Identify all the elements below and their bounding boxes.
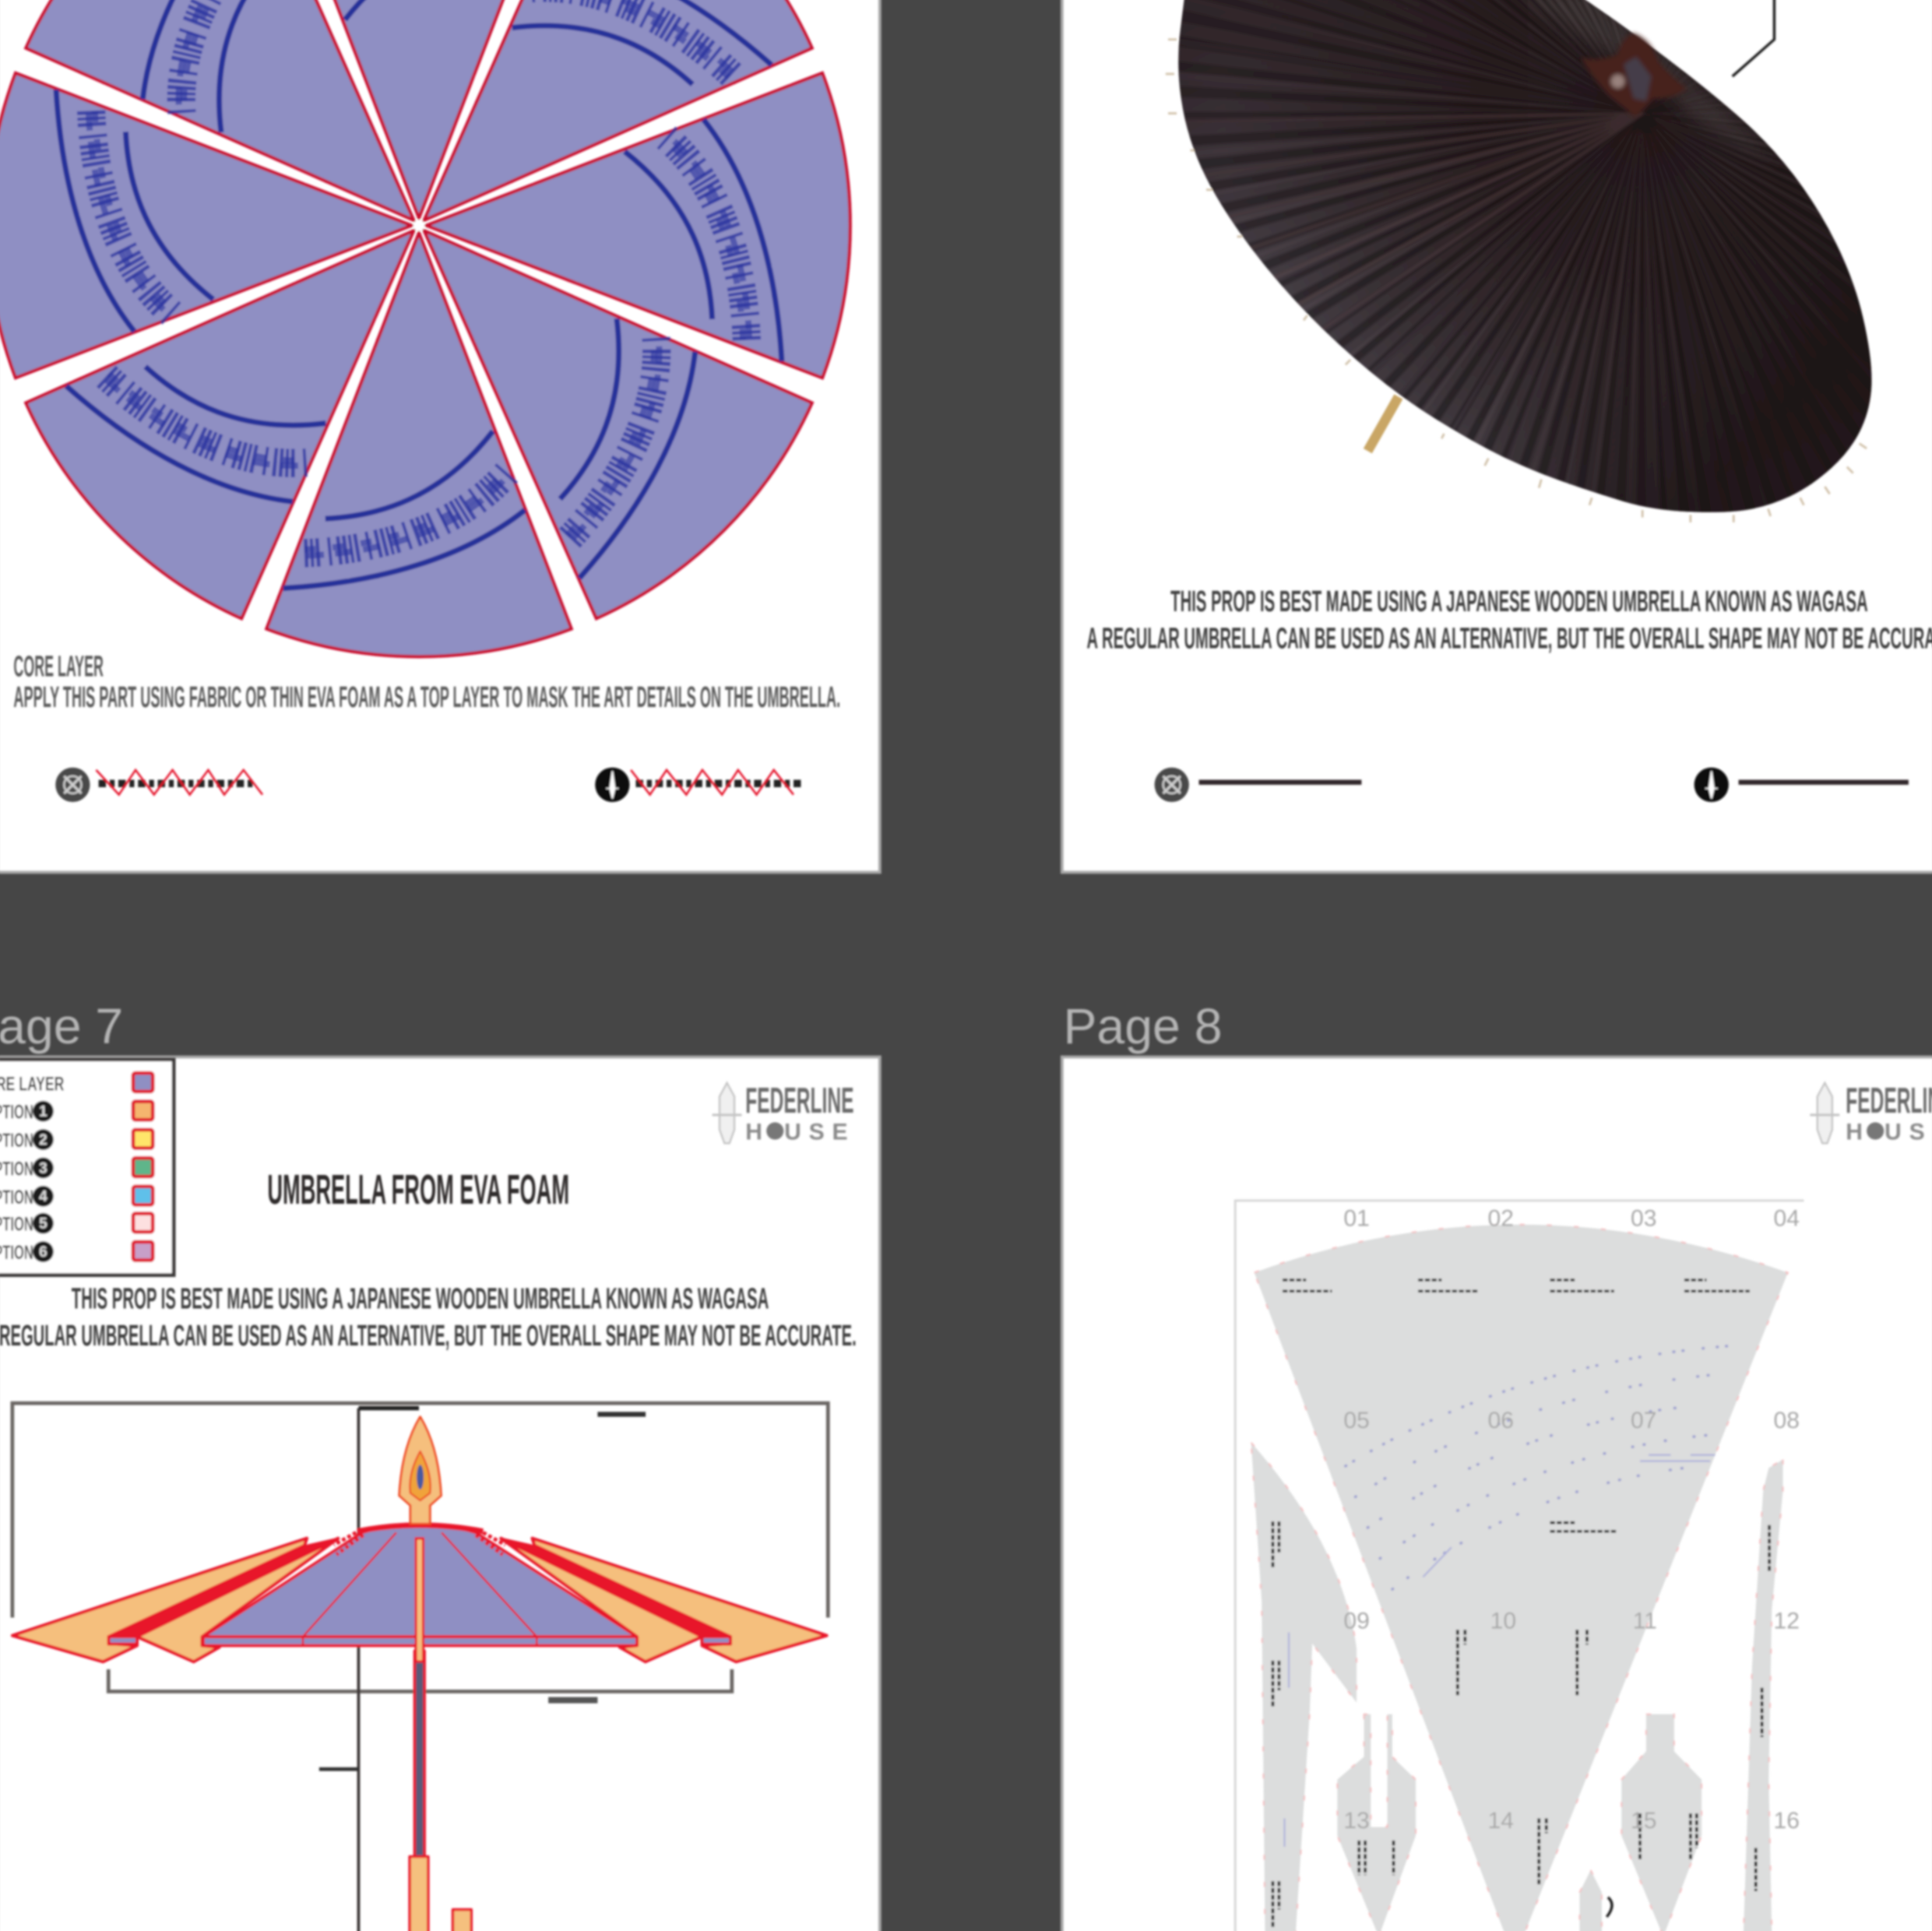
illustration: umbrella cross-section [12,1417,827,1931]
illustration: rib tips [1166,40,1867,522]
template: left curved strip [1251,1443,1357,1931]
template: blade solid [1621,1715,1701,1931]
icon: shield legend with zigzag [55,768,262,802]
text block: wagasa note: THIS PROP IS BEST MADE USING A JAPANESE WOODEN UMBRELLA KNOWN AS WAGASA [72,1282,769,1315]
dimension brackets [12,1403,828,1931]
page grid numbers: 07 [1631,1408,1656,1433]
text block: core layer instruction [13,651,840,714]
page grid numbers: 16 [1774,1808,1800,1834]
chart: eight wedge core layer [0,0,850,656]
illustration: handle [1367,396,1399,451]
callout line [1733,0,1774,76]
text block: core layer instruction: CORE LAYER [13,651,104,684]
page grid numbers: 15 [1631,1808,1656,1834]
text block: wagasa note: A REGULAR UMBRELLA CAN BE USED AS AN ALTERNATIVE, BUT THE OVERALL SHAPE MAY NOT BE ACCURATE. [0,1320,857,1352]
legend: layer colour key: 5 [39,1215,48,1232]
page grid numbers: 12 [1774,1609,1800,1634]
illustration: right orange wings [501,1539,827,1662]
illustration: central spine [416,1539,424,1662]
logo: Federline House: H USE [745,1120,848,1145]
page grid numbers: 06 [1487,1408,1514,1433]
page grid numbers: 01 [1343,1205,1370,1231]
panel: page 8, cut-out template sheet [1062,1057,1932,1931]
logo: Federline House: FEDERLINE [745,1080,854,1120]
page grid numbers: 11 [1633,1609,1657,1634]
logo: Federline House [713,1080,854,1145]
faded short rune strokes [1285,1455,1716,1847]
sheet border [1235,1201,1804,1931]
icon: sword legend with line [1694,768,1909,802]
text block: wagasa note [1087,586,1932,655]
legend: layer colour key: 3 [39,1160,48,1177]
legend: layer colour key [0,1060,174,1275]
small part labels [1272,1280,1769,1928]
page grid numbers: 13 [1343,1808,1370,1834]
template: blade with slot [1337,1715,1416,1931]
page label: Page 8: Page 8 [1063,998,1223,1054]
legend: layer colour key: 4 [39,1189,48,1205]
illustration: finial [399,1417,441,1524]
template: small tip piece [1579,1870,1602,1931]
panel: page 5, core layer wheel [0,0,880,872]
icon: shield legend with line [1155,768,1361,802]
template: main wedge [1255,1225,1788,1931]
logo: Federline House [1810,1080,1932,1145]
illustration: finial flower [1581,33,1687,117]
illustration: pole and handle [410,1651,471,1931]
page grid numbers: 10 [1490,1609,1516,1634]
page grid numbers: 02 [1487,1205,1514,1231]
panel: page 6, reference umbrella photo [1059,0,1932,875]
illustration: blue core canopy [203,1524,637,1645]
page grid numbers: 08 [1774,1408,1800,1433]
page grid numbers: 14 [1487,1808,1514,1834]
panel: page 5, core layer wheel: APPLY THIS PART USING FABRIC OR THIN EVA FOAM AS A TOP LAYER TO MASK THE ART DETAILS ON THE UMBRELLA. [13,681,840,714]
page grid numbers: 04 [1774,1205,1800,1231]
template: right strip [1744,1459,1783,1931]
page grid numbers: 05 [1343,1408,1370,1433]
icon: sword legend with zigzag [595,768,801,802]
legend: layer colour key: 6 [39,1244,48,1261]
illustration: dark wagasa canopy [1177,0,1874,514]
illustration: left orange wings [12,1539,338,1662]
page grid numbers [1343,1205,1800,1834]
legend: layer colour key: 1 [39,1104,48,1120]
title: UMBRELLA FROM EVA FOAM [267,1166,569,1213]
legend: layer colour key: 2 [39,1132,48,1148]
text block: wagasa note [0,1282,857,1352]
panel: page 7, umbrella from EVA foam [0,1057,880,1931]
template shapes [1251,1225,1788,1931]
faded dotted rune layout [1346,1345,1737,1589]
page grid numbers: 09 [1343,1609,1370,1634]
page grid numbers: 03 [1631,1205,1656,1231]
